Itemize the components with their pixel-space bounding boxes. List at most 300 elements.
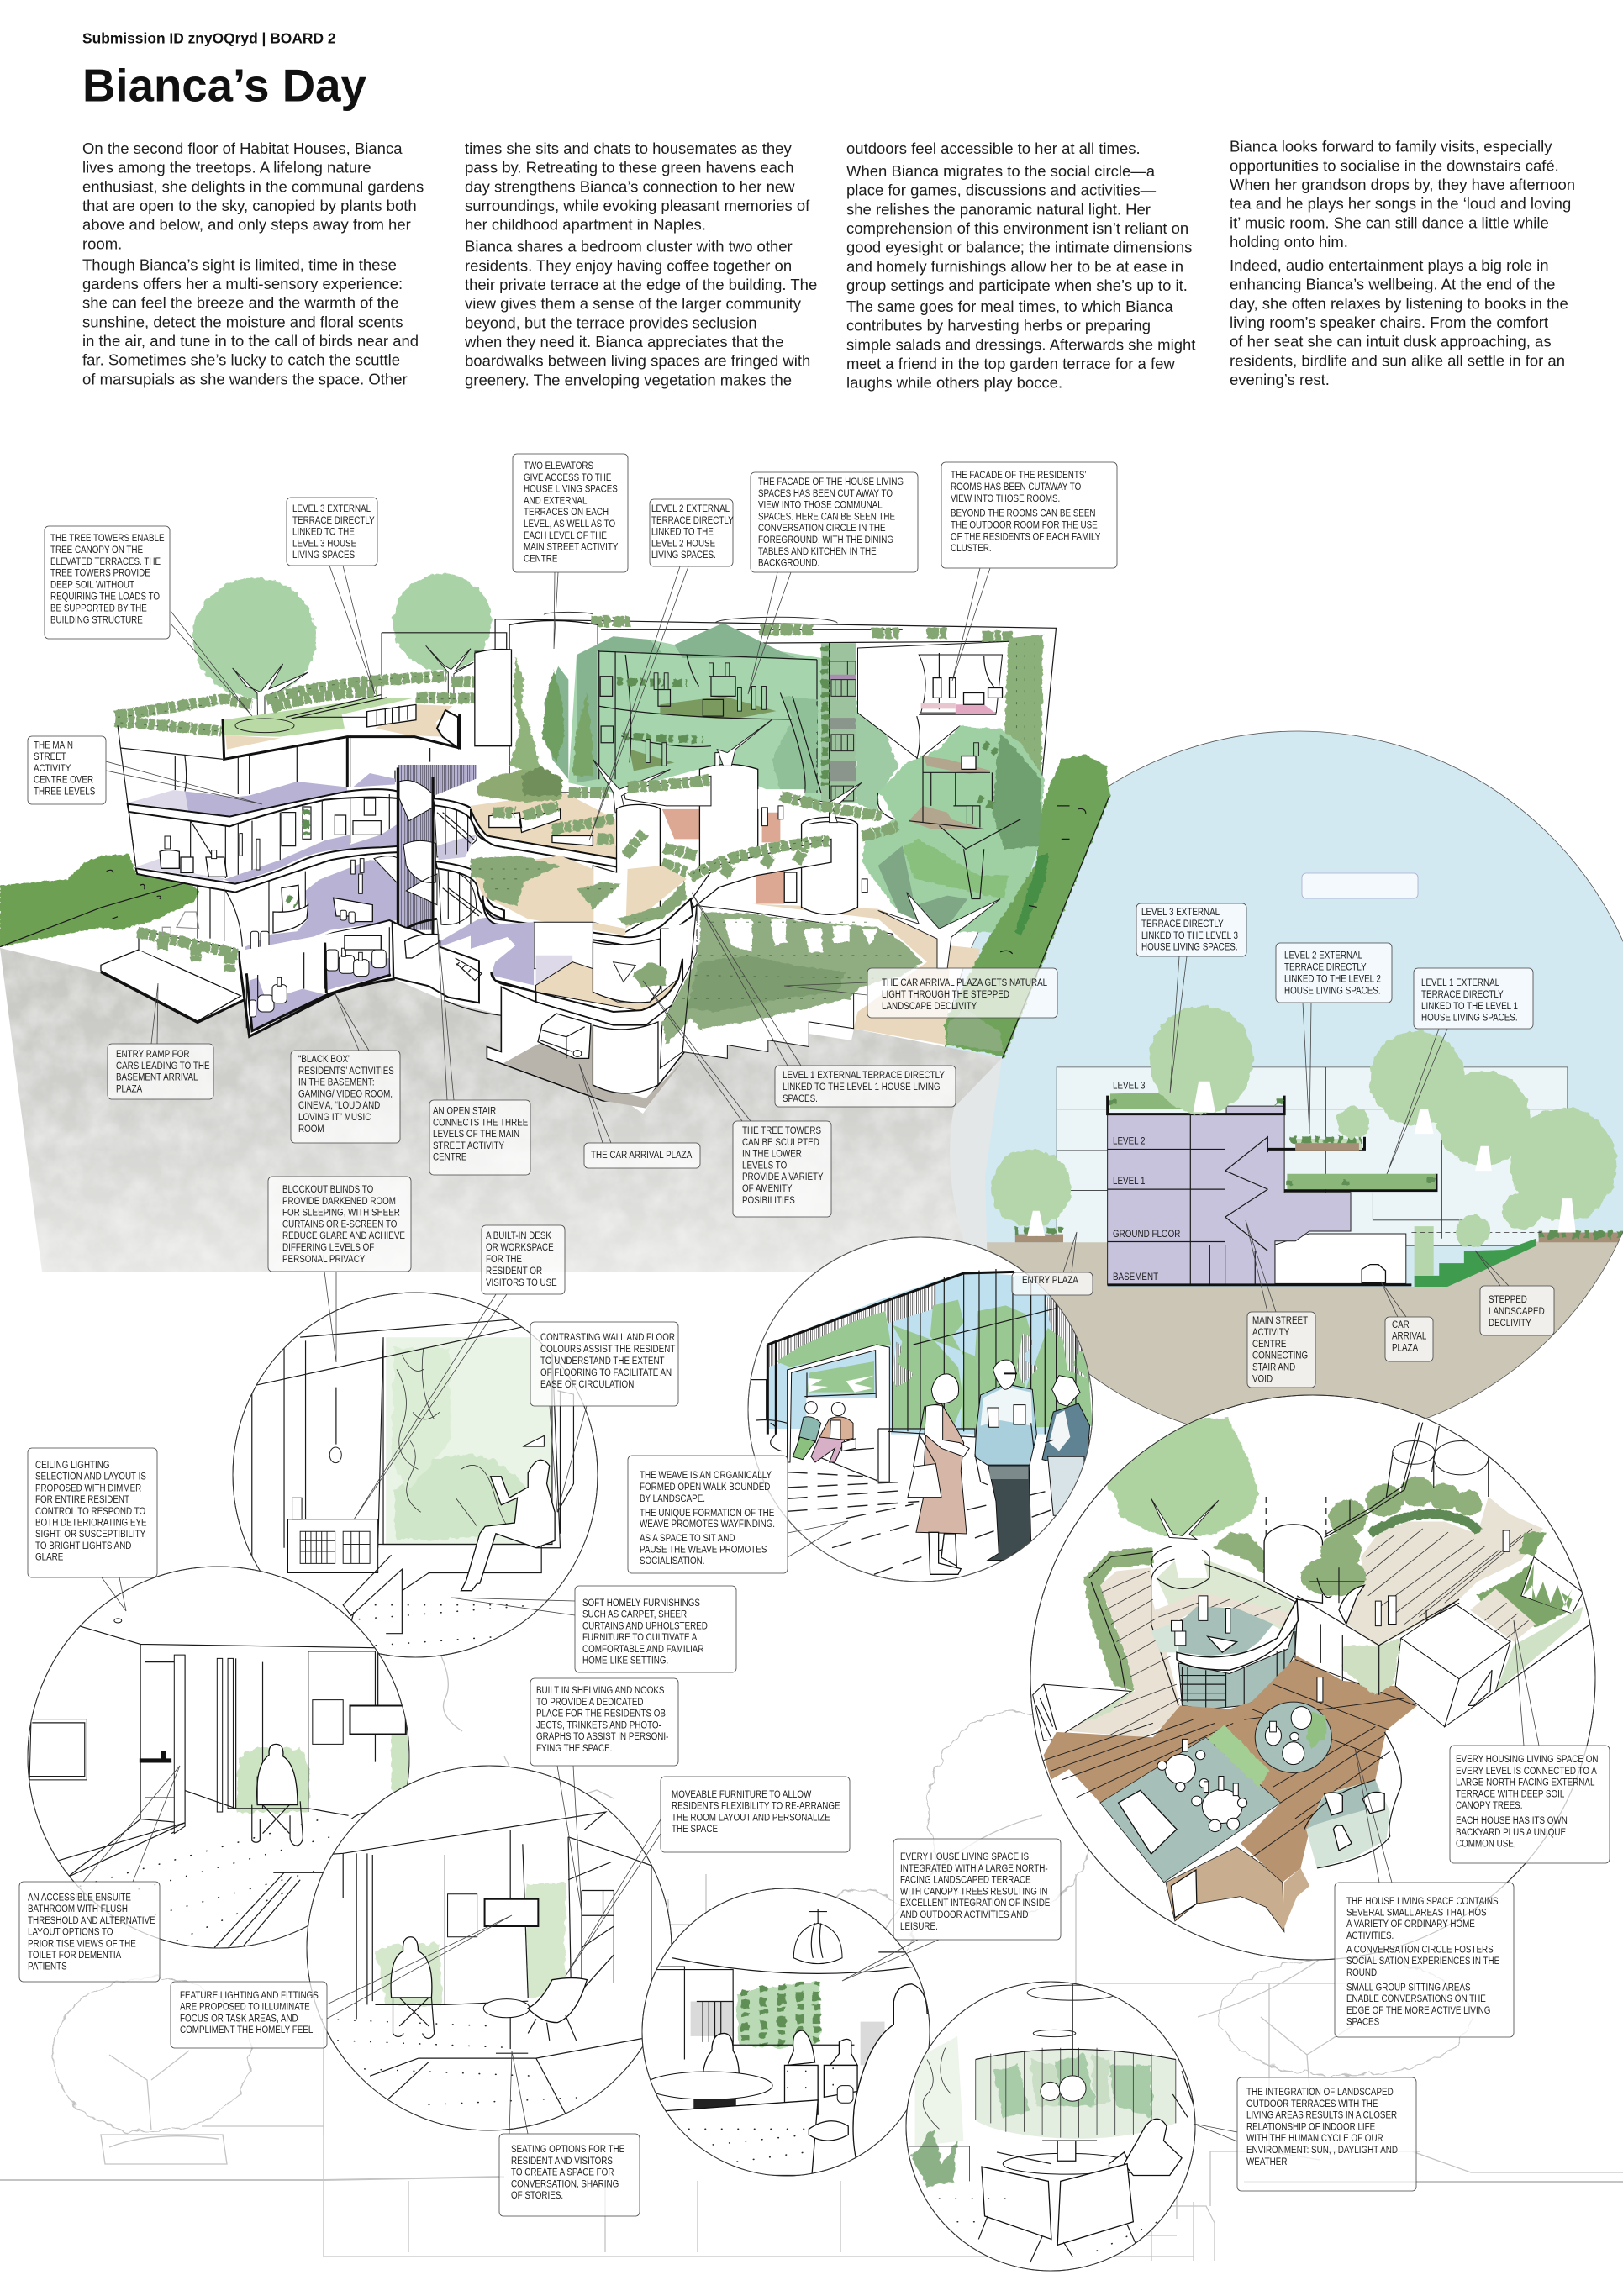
callout: two elevators — [513, 454, 628, 649]
callout: tree towers sculpted: POSIBILITIES — [742, 1195, 795, 1206]
callout: accessible ensuite: TOILET FOR DEMENTIA — [28, 1950, 122, 1961]
callout: accessible ensuite: AN ACCESSIBLE ENSUITE — [28, 1893, 131, 1904]
car arrival plaza — [487, 987, 684, 1101]
callout: blockout blinds: DIFFERING LEVELS OF — [282, 1242, 375, 1253]
text block: column 3: outdoors feel accessible to her at all times. — [846, 140, 1141, 157]
callout: blockout blinds: PROVIDE DARKENED ROOM — [282, 1196, 396, 1207]
glass cylinders on roof — [1393, 1441, 1435, 1464]
callout: the weave: THE WEAVE IS AN ORGANICALLY — [640, 1470, 772, 1481]
submission line: Submission ID znyOQryd | BOARD 2 — [82, 30, 336, 47]
callout: natural light: LANDSCAPE DECLIVITY — [882, 1001, 977, 1012]
callout: built-in desk: VISITORS TO USE — [486, 1277, 557, 1288]
callout: every housing living space: EVERY LEVEL IS CONNECTED TO A — [1456, 1766, 1597, 1777]
text block: column 1: lives among the treetops. A lifelong nature — [82, 159, 371, 176]
ground — [977, 1241, 1623, 1424]
callout: every house living space: FACING LANDSCAPED TERRACE — [900, 1875, 1031, 1886]
ground plane under the cutaway building — [0, 948, 1002, 1272]
green bank — [943, 755, 1110, 1056]
callout: built-in desk: RESIDENT OR — [486, 1266, 542, 1277]
teal dining floor — [1100, 1737, 1281, 1883]
callout: section level 3 terrace: HOUSE LIVING SPACES. — [1141, 942, 1238, 953]
text block: column 2: pass by. Retreating to these green havens each — [465, 159, 793, 176]
dark arc — [1370, 1514, 1479, 1534]
callout: two elevators: CENTRE — [524, 554, 557, 565]
entry ramp — [101, 950, 241, 1021]
callout: black box — [291, 994, 400, 1143]
callout: main street stair: VOID — [1252, 1374, 1273, 1385]
callout: accessible ensuite: PRIORITISE VIEWS OF THE — [28, 1938, 136, 1950]
back glass volume — [568, 623, 821, 813]
text block: column 1: gardens offers her a multi-sensory experience: — [82, 275, 403, 292]
callout: natural light — [784, 968, 1057, 1018]
callout: built-in desk — [354, 1225, 565, 1519]
callout: ceiling lighting: TO BRIGHT LIGHTS AND — [35, 1540, 131, 1551]
section level labels: LEVEL 3 — [1113, 1081, 1145, 1092]
callout: moveable furniture: THE SPACE — [672, 1824, 718, 1835]
callout: seating options: TO CREATE A SPACE FOR — [511, 2167, 614, 2178]
callout: section level 1 terrace: HOUSE LIVING SPACES. — [1421, 1013, 1518, 1024]
callout: car arrival plaza — [579, 1064, 700, 1168]
seated woman pink — [819, 1417, 853, 1443]
callout: every house living space: INTEGRATED WITH A LARGE NORTH- — [900, 1863, 1048, 1874]
callout: section level 1 terrace: LINKED TO THE LEVEL 1 — [1421, 1001, 1518, 1012]
section level labels — [1113, 1081, 1180, 1282]
callout: facade of house living spaces: BACKGROUND. — [758, 558, 819, 569]
cypresses — [509, 656, 542, 776]
callout: main street stair: ACTIVITY — [1252, 1327, 1290, 1338]
callout: soft homely furnishings: CURTAINS AND UPHOLSTERED — [582, 1621, 708, 1632]
cylinder on terrace — [593, 804, 660, 932]
callout: section car plaza: CAR — [1392, 1319, 1410, 1330]
callout: soft homely furnishings: FURNITURE TO CULTIVATE A — [582, 1632, 698, 1643]
callout: black box: RESIDENTS’ ACTIVITIES — [298, 1066, 394, 1077]
callout: section car plaza — [1381, 1282, 1433, 1361]
callout: level 1 terrace: SPACES. — [783, 1093, 818, 1104]
text block: column 4: day, she often relaxes by listening to books in the — [1230, 294, 1568, 312]
callout: every housing living space: COMMON USE, — [1456, 1839, 1516, 1850]
callout: house living space areas: SMALL GROUP SITTING AREAS — [1346, 1983, 1471, 1993]
callout: section level 3 terrace — [1136, 903, 1246, 1093]
callout: built-in desk: A BUILT-IN DESK — [486, 1230, 552, 1241]
callout: tree towers canopy: ELEVATED TERRACES. THE — [50, 556, 161, 567]
callout: tree towers canopy: BE SUPPORTED BY THE — [50, 603, 147, 614]
callout: blockout blinds: BLOCKOUT BLINDS TO — [282, 1184, 373, 1195]
text block: column 4 — [1230, 138, 1575, 388]
section level labels: LEVEL 1 — [1113, 1176, 1145, 1187]
callout: black box: ROOM — [298, 1124, 324, 1135]
section: purple levels — [1108, 1106, 1351, 1285]
tree trunk front — [878, 893, 1000, 969]
callout: tree towers canopy: TREE TOWERS PROVIDE — [50, 568, 150, 579]
text block: column 2: beyond, but the terrace provides seclusion — [465, 313, 757, 331]
text block: column 2: residents. They enjoy having coffee together on — [465, 256, 792, 274]
callout: integration of terraces: ENVIRONMENT: SUN, , DAYLIGHT AND — [1246, 2145, 1398, 2156]
callout: contrasting colours: TO UNDERSTAND THE EXTENT — [540, 1356, 665, 1367]
callout: house living space areas: ROUND. — [1346, 1967, 1379, 1978]
inset circle D: cafe with hanging green wall — [642, 1888, 939, 2199]
callout: every housing living space: BACKYARD PLUS A UNIQUE — [1456, 1827, 1566, 1838]
callout: level 2 terrace: LINKED TO THE — [651, 527, 714, 538]
callout: integration of terraces: WITH THE HUMAN CYCLE OF OUR — [1246, 2133, 1383, 2144]
callout: the weave — [628, 1456, 848, 1573]
callout: facade of residents rooms: ROOMS HAS BEEN CUTAWAY TO — [951, 482, 1081, 492]
callout: level 2 terrace: LEVEL 2 HOUSE — [651, 539, 715, 550]
callout: section level 2 terrace: LINKED TO THE LEVEL 2 — [1284, 974, 1381, 985]
callout: facade of residents rooms: CLUSTER. — [951, 543, 992, 554]
inset circle G: the weave with people — [748, 1237, 1093, 1582]
callout: ceiling lighting: BOTH DETERIORATING EYE — [35, 1518, 147, 1529]
callout: two elevators: TWO ELEVATORS — [524, 461, 593, 471]
callout: the weave: SOCIALISATION. — [640, 1556, 704, 1567]
inset circle F: axonometric of house living space — [1030, 1395, 1595, 1960]
callout: level 1 terrace: LEVEL 1 EXTERNAL TERRACE DIRECTLY — [783, 1070, 946, 1081]
text block: column 2: her childhood apartment in Naples. — [465, 216, 706, 234]
callout: main street stair: CENTRE — [1252, 1339, 1286, 1350]
callout: entry ramp — [108, 983, 213, 1099]
callout: two elevators: HOUSE LIVING SPACES — [524, 484, 618, 495]
callout: built in shelving: BUILT IN SHELVING AND NOOKS — [536, 1685, 664, 1696]
callout: every housing living space: EACH HOUSE HAS ITS OWN — [1456, 1815, 1568, 1826]
callout: level 1 terrace — [692, 893, 956, 1107]
text block: column 1: room. — [82, 234, 122, 252]
callout: facade of residents rooms: OF THE RESIDENTS OF EACH FAMILY — [951, 532, 1101, 543]
big green tree — [862, 726, 1045, 932]
callout: main street centre: STREET — [34, 751, 66, 762]
callout: tree towers canopy: REQUIRING THE LOADS TO — [50, 592, 160, 603]
roof planter terrace — [223, 698, 416, 737]
callout: every housing living space: EVERY HOUSING LIVING SPACE ON — [1456, 1754, 1599, 1765]
callout: two elevators: EACH LEVEL OF THE — [524, 530, 607, 541]
callout: tree towers sculpted: IN THE LOWER — [742, 1149, 802, 1160]
shrub cluster — [1300, 1477, 1482, 1596]
text block: column 3: place for games, discussions and activities— — [846, 182, 1157, 199]
callout: moveable furniture: MOVEABLE FURNITURE TO ALLOW — [672, 1789, 812, 1800]
text block: column 3: The same goes for meal times, to which Bianca — [846, 298, 1173, 315]
callout: tree towers canopy: DEEP SOIL WITHOUT — [50, 580, 134, 591]
callout: natural light: THE CAR ARRIVAL PLAZA GETS NATURAL — [882, 977, 1047, 988]
text block: column 4: evening’s rest. — [1230, 371, 1330, 388]
callout: moveable furniture: RESIDENTS FLEXIBILITY TO RE-ARRANGE — [672, 1801, 840, 1812]
callout: main street centre: CENTRE OVER — [34, 775, 93, 786]
callout: level 2 terrace: LIVING SPACES. — [651, 550, 716, 561]
people level 2 — [160, 850, 227, 877]
salmon walls — [662, 809, 784, 904]
text block: column 1: she can feel the breeze and the warmth of the — [82, 294, 398, 312]
callout: the weave: WEAVE PROMOTES WAYFINDING. — [640, 1519, 775, 1530]
text block: column 3: she relishes the panoramic natural light. Her — [846, 200, 1151, 218]
branching trunks — [593, 719, 862, 823]
callout: built-in desk: OR WORKSPACE — [486, 1242, 554, 1253]
callout: soft homely furnishings: HOME-LIKE SETTING. — [582, 1656, 668, 1667]
callout: entry ramp: BASEMENT ARRIVAL — [116, 1072, 198, 1083]
man blue shirt — [975, 1384, 1036, 1465]
basement — [238, 922, 393, 1036]
callout: open stair: CENTRE — [433, 1152, 466, 1163]
callout: section level 1 terrace — [1387, 968, 1533, 1174]
callout: main street centre: THE MAIN — [34, 740, 73, 751]
callout: every house living space: AND OUTDOOR ACTIVITIES AND — [900, 1909, 1029, 1920]
text block: column 4: Indeed, audio entertainment plays a big role in — [1230, 256, 1549, 274]
callout: the weave: BY LANDSCAPE. — [640, 1493, 705, 1504]
lower terrace — [471, 856, 687, 935]
text block: column 1: enthusiast, she delights in the communal gardens — [82, 177, 424, 195]
callout: section level 1 terrace: LEVEL 1 EXTERNAL — [1421, 977, 1499, 988]
callout: black box: CINEMA, “LOUD AND — [298, 1100, 380, 1111]
text block: column 2: day strengthens Bianca’s connection to her new — [465, 177, 795, 195]
callout: house living space areas: A CONVERSATION CIRCLE FOSTERS — [1346, 1945, 1494, 1956]
callout: facade of house living spaces: FOREGROUND, WITH THE DINING — [758, 535, 893, 545]
section level labels: BASEMENT — [1113, 1272, 1158, 1282]
cutaway axonometric: left building — [0, 645, 504, 1036]
text block: column 4: When her grandson drops by, they have afternoon — [1230, 176, 1575, 193]
callout: level 3 terrace — [287, 498, 377, 694]
callout: built in shelving: FYING THE SPACE. — [536, 1743, 612, 1754]
callout: black box: LOVING IT” MUSIC — [298, 1112, 371, 1123]
callout: every housing living space: CANOPY TREES. — [1456, 1800, 1522, 1811]
text block: column 3: good eyesight or balance; the intimate dimensions — [846, 239, 1192, 256]
callout: every housing living space: LARGE NORTH-FACING EXTERNAL — [1456, 1777, 1594, 1788]
callout: section level 2 terrace: HOUSE LIVING SPACES. — [1284, 986, 1381, 997]
callout: facade of house living spaces: SPACES. HERE CAN BE SEEN THE — [758, 512, 895, 523]
callout: tree towers canopy — [45, 526, 252, 716]
text block: column 2: Bianca shares a bedroom cluster with two other — [465, 238, 793, 255]
title: Bianca’s Day — [82, 61, 366, 111]
callout: house living space areas: SOCIALISATION EXPERIENCES IN THE — [1346, 1956, 1499, 1967]
callout: open stair — [429, 919, 530, 1175]
callout: section level 3 terrace: TERRACE DIRECTLY — [1141, 919, 1224, 929]
callout: main street centre — [28, 736, 262, 804]
text block: column 1: sunshine, detect the moisture and floral scents — [82, 313, 403, 330]
callout: entry plaza — [1012, 1232, 1093, 1295]
text block: column 3: When Bianca migrates to the social circle—a — [846, 162, 1156, 180]
text block: column 1: Though Bianca’s sight is limited, time in these — [82, 255, 397, 273]
text block: column 1 — [82, 140, 424, 387]
callout: main street centre: ACTIVITY — [34, 763, 71, 774]
callout: two elevators: AND EXTERNAL — [524, 496, 587, 507]
text block: column 3: simple salads and dressings. Afterwards she might — [846, 335, 1195, 353]
bench shelter — [788, 1345, 889, 1482]
callout: integration of terraces: OUTDOOR TERRACES WITH THE — [1246, 2099, 1378, 2109]
callout: built in shelving — [530, 1678, 678, 1912]
callout: every housing living space: TERRACE WITH DEEP SOIL — [1456, 1789, 1564, 1800]
cutaway axonometric: right tower, terraces and green bank — [471, 612, 1110, 1109]
green mass — [856, 699, 898, 813]
planting — [1110, 1092, 1436, 1189]
left curved hedge — [1083, 1546, 1153, 1692]
callout: tree towers sculpted: CAN BE SCULPTED — [742, 1137, 819, 1148]
circular sitting — [1255, 1702, 1331, 1772]
callout: tree towers sculpted — [643, 981, 831, 1217]
trees and hedge behind left wing — [193, 574, 514, 700]
callout: ceiling lighting: PROPOSED WITH DIMMER — [35, 1483, 141, 1494]
residents tower — [857, 641, 1013, 760]
callout: tree towers sculpted: LEVELS TO — [742, 1161, 787, 1172]
callout: level 1 terrace: LINKED TO THE LEVEL 1 HOUSE LIVING — [783, 1082, 941, 1093]
teal room floor — [1178, 1606, 1273, 1656]
callout: contrasting colours: EASE OF CIRCULATION — [540, 1379, 634, 1390]
callout: house living space areas: A VARIETY OF ORDINARY HOME — [1346, 1919, 1475, 1930]
callout: two elevators: GIVE ACCESS TO THE — [524, 472, 611, 483]
text block: column 2: their private terrace at the edge of the building. The — [465, 276, 817, 293]
text block: column 4: Bianca looks forward to family visits, especially — [1230, 138, 1552, 155]
inset circle A: bedroom with reading resident — [230, 1293, 606, 1657]
pale terrace and glass room — [1157, 1553, 1297, 1638]
white cylinders — [699, 764, 758, 872]
callout: contrasting colours: CONTRASTING WALL AND FLOOR — [540, 1332, 675, 1343]
callout: level 2 terrace — [589, 499, 734, 840]
back shrubs — [1213, 1532, 1264, 1575]
callout: integration of terraces: LIVING AREAS RESULTS IN A CLOSER — [1246, 2110, 1397, 2121]
callout: soft homely furnishings: SOFT HOMELY FURNISHINGS — [582, 1598, 700, 1609]
section level labels: GROUND FLOOR — [1113, 1229, 1180, 1240]
roof outline — [495, 619, 1057, 786]
text block: column 4: holding onto him. — [1230, 233, 1348, 250]
callout: level 3 terrace: TERRACE DIRECTLY — [292, 515, 375, 526]
text block: column 2: boardwalks between living spaces are fringed with — [465, 352, 810, 370]
callout: entry ramp: PLAZA — [116, 1084, 143, 1095]
people — [1375, 1530, 1510, 1626]
tree trunks — [233, 645, 473, 723]
callout: section level 2 terrace — [1276, 943, 1392, 1134]
text block: column 2: surroundings, while evoking pleasant memories of — [465, 197, 810, 214]
callout: accessible ensuite: THRESHOLD AND ALTERNATIVE — [28, 1915, 155, 1926]
tree rooms — [909, 756, 992, 829]
callout: every house living space: LEISURE. — [900, 1921, 938, 1932]
callout: facade of residents rooms: THE OUTDOOR ROOM FOR THE USE — [951, 520, 1098, 531]
callout: ceiling lighting: CONTROL TO RESPOND TO — [35, 1506, 145, 1517]
callout: blockout blinds: PERSONAL PRIVACY — [282, 1254, 366, 1265]
stepped landscape vines — [660, 905, 893, 1068]
planter — [1208, 1725, 1270, 1787]
callout: stepped declivity: DECLIVITY — [1489, 1318, 1531, 1329]
callout: main street stair — [1246, 1220, 1315, 1388]
callout: tree towers canopy: THE TREE TOWERS ENABLE — [50, 533, 165, 544]
callout: built in shelving: TO PROVIDE A DEDICATED — [536, 1697, 644, 1708]
text block: column 2: times she sits and chats to housemates as they — [465, 140, 792, 157]
callout: built in shelving: JECTS, TRINKETS AND PHOTO- — [536, 1720, 661, 1731]
callout: level 2 terrace: TERRACE DIRECTLY — [651, 515, 734, 526]
text block: column 4: of her seat she can intuit dusk approaching, as — [1230, 333, 1552, 350]
callout: two elevators: LEVEL, AS WELL AS TO — [524, 519, 615, 529]
callout: feature lighting: FOCUS OR TASK AREAS, AND — [180, 2014, 298, 2025]
callout: the weave: PAUSE THE WEAVE PROMOTES — [640, 1545, 767, 1556]
callout: facade of house living spaces: CONVERSATION CIRCLE IN THE — [758, 523, 886, 534]
callout: seating options — [499, 2051, 640, 2216]
callout: black box: GAMING/ VIDEO ROOM, — [298, 1089, 393, 1100]
inset circle B: wheelchair resident at window — [28, 1567, 413, 1955]
callout: two elevators: TERRACES ON EACH — [524, 507, 609, 518]
callout: ceiling lighting: FOR ENTIRE RESIDENT — [35, 1494, 129, 1505]
people — [715, 753, 867, 893]
callout: black box: “BLACK BOX” — [298, 1054, 351, 1065]
brown wall — [1166, 1847, 1284, 1932]
text block: column 1: On the second floor of Habitat Houses, Bianca — [82, 140, 403, 157]
green foliage — [776, 1311, 891, 1367]
callout: level 3 terrace: LEVEL 3 HOUSE — [292, 539, 356, 550]
callout: feature lighting: FEATURE LIGHTING AND FITTINGS — [180, 1990, 319, 2001]
callout: natural light: LIGHT THROUGH THE STEPPED — [882, 989, 1009, 1000]
callout: blockout blinds: CURTAINS OR E-SCREEN TO — [282, 1219, 397, 1230]
woman with dress — [916, 1403, 967, 1534]
hedge on ramp bank — [0, 855, 199, 947]
callout: every house living space — [842, 1839, 1061, 1981]
section trees — [992, 1005, 1616, 1247]
text block: column 1: in the air, and tune in to the call of birds near and — [82, 332, 419, 350]
text block: column 3: comprehension of this environment isn’t reliant on — [846, 219, 1188, 237]
callout: the weave: AS A SPACE TO SIT AND — [640, 1533, 735, 1544]
section level labels: LEVEL 2 — [1113, 1136, 1145, 1147]
callout: two elevators: MAIN STREET ACTIVITY — [524, 542, 619, 553]
text block: column 2: when they need it. Bianca appreciates that the — [464, 333, 784, 350]
blank label box in sky — [1302, 873, 1418, 898]
cylinder — [1264, 1525, 1322, 1603]
callout: level 3 terrace: LEVEL 3 EXTERNAL — [292, 503, 371, 514]
text block: column 1: that are open to the sky, canopied by plants both — [82, 197, 417, 214]
text block: column 3: laughs while others play bocce. — [846, 374, 1062, 392]
spiral stair — [398, 765, 435, 930]
callout: section level 3 terrace: LEVEL 3 EXTERNAL — [1141, 907, 1220, 918]
callout: the weave: FORMED OPEN WALK BOUNDED — [640, 1482, 770, 1493]
callout: accessible ensuite: PATIENTS — [28, 1962, 67, 1972]
callout: accessible ensuite: BATHROOM WITH FLUSH — [28, 1904, 128, 1914]
white wall left — [1033, 1684, 1131, 1740]
callout: integration of terraces: RELATIONSHIP OF INDOOR LIFE — [1246, 2122, 1375, 2133]
callout: section car plaza: PLAZA — [1392, 1343, 1419, 1354]
callout: ceiling lighting — [28, 1448, 157, 1611]
left hatched deck — [1053, 1567, 1180, 1737]
vines on columns — [628, 779, 898, 835]
callout: house living space areas — [1335, 1748, 1514, 2037]
arch and lower curved wall — [393, 922, 479, 1003]
callout: entry ramp: CARS LEADING TO THE — [116, 1061, 210, 1072]
callout: moveable furniture — [566, 1777, 850, 1976]
inset circle C: living room with pendant lamp — [307, 1766, 672, 2130]
text block: column 4: tea and he plays her songs in the ‘loud and loving — [1230, 195, 1571, 213]
tree canopy — [1105, 1417, 1259, 1537]
callout: contrasting colours: COLOURS ASSIST THE RESIDENT — [540, 1344, 676, 1355]
car — [1362, 1265, 1385, 1283]
callout: every housing living space — [1450, 1620, 1610, 1863]
callout: built in shelving: PLACE FOR THE RESIDENTS OB- — [536, 1709, 669, 1719]
callout: seating options: RESIDENT AND VISITORS — [511, 2156, 613, 2167]
callout: tree towers sculpted: OF AMENITY — [742, 1183, 793, 1194]
callout: ceiling lighting: GLARE — [35, 1552, 63, 1563]
text block: column 1: of marsupials as she wanders the space. Other — [82, 370, 408, 387]
callout: entry plaza: ENTRY PLAZA — [1022, 1275, 1078, 1286]
callout: house living space areas: SEVERAL SMALL AREAS THAT HOST — [1346, 1908, 1492, 1919]
callout: soft homely furnishings: COMFORTABLE AND FAMILIAR — [582, 1644, 704, 1655]
text block: column 3: group settings and participate when she’s up to it. — [846, 276, 1188, 294]
text block: column 2 — [464, 140, 817, 388]
callout: tree towers sculpted: PROVIDE A VARIETY — [742, 1172, 824, 1182]
faint background section drawing — [0, 1647, 1623, 2261]
callout: blockout blinds: FOR SLEEPING, WITH SHEER — [282, 1208, 400, 1219]
callout: accessible ensuite — [19, 1766, 180, 1982]
callout: facade of residents rooms — [941, 462, 1117, 681]
text block: column 4: enhancing Bianca’s wellbeing. At the end of the — [1230, 276, 1555, 293]
callout: house living space areas: ACTIVITIES. — [1346, 1930, 1394, 1941]
callout: main street stair: STAIR AND — [1252, 1362, 1295, 1373]
callout: tree towers canopy: TREE CANOPY ON THE — [50, 545, 143, 556]
callout: seating options: SEATING OPTIONS FOR THE — [511, 2144, 624, 2155]
callout: every house living space: EXCELLENT INTEGRATION OF INSIDE — [900, 1898, 1050, 1909]
callout: ceiling lighting: CEILING LIGHTING — [35, 1460, 110, 1471]
callout: moveable furniture: THE ROOM LAYOUT AND PERSONALIZE — [672, 1813, 830, 1824]
callout: stepped declivity: STEPPED — [1489, 1294, 1527, 1305]
callout: feature lighting — [171, 1915, 512, 2048]
upper terrace — [471, 793, 638, 862]
callout: section level 2 terrace: TERRACE DIRECTLY — [1284, 962, 1367, 973]
